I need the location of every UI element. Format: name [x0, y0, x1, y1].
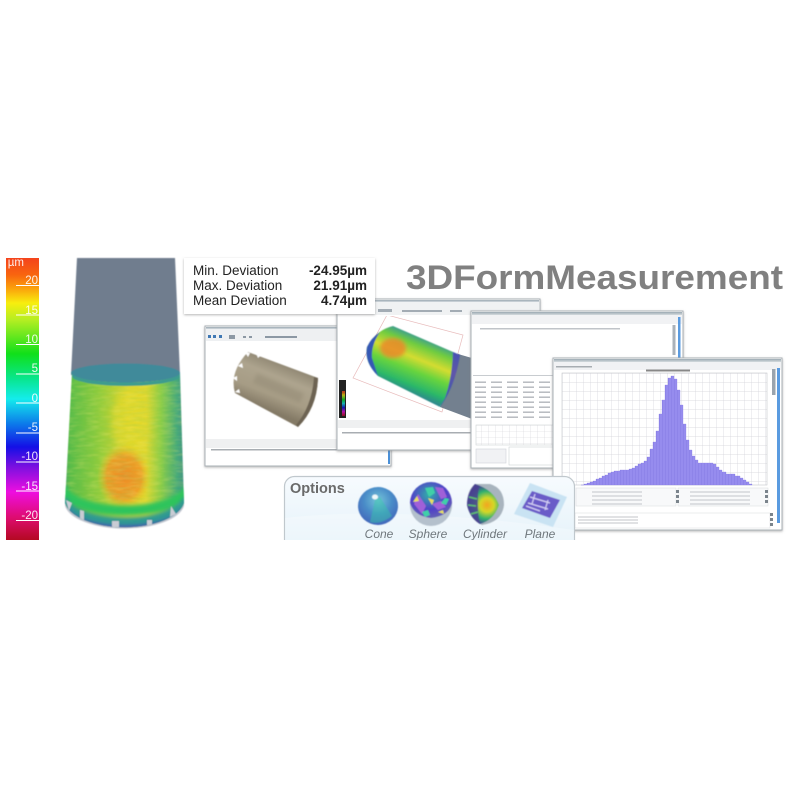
toolbar	[206, 329, 390, 341]
upper table header	[480, 328, 620, 330]
rotated colour cylinder	[353, 315, 472, 419]
tab strip	[554, 362, 781, 370]
scale labels: -15	[21, 481, 38, 493]
stat: maximum deviation: 21.91µm	[313, 278, 367, 293]
stat: maximum deviation: Max. Deviation	[193, 278, 282, 293]
stat: maximum deviation	[193, 278, 367, 293]
bounding box	[353, 315, 463, 412]
window: results table	[471, 311, 683, 468]
options heading: Options	[290, 481, 345, 497]
lower table	[474, 380, 553, 420]
colour scale legend	[6, 257, 39, 540]
title bar	[472, 312, 682, 315]
small line chart panel	[476, 425, 553, 445]
window: colour map view	[337, 299, 540, 450]
icon: sphere	[410, 482, 452, 526]
title bar	[554, 359, 781, 362]
option labels	[365, 529, 555, 540]
input fields	[476, 449, 506, 463]
grid	[562, 373, 767, 485]
cylinder body	[366, 326, 460, 407]
scale labels: -10	[21, 451, 38, 463]
stat: minimum deviation: -24.95µm	[309, 263, 367, 278]
title bar	[338, 300, 539, 302]
scale labels: 20	[25, 275, 38, 287]
lower blue band	[70, 508, 180, 528]
lower teal band	[62, 498, 188, 523]
cone body heat map	[64, 374, 185, 528]
stat: mean deviation: 4.74µm	[321, 293, 367, 308]
options panel	[284, 476, 576, 540]
option labels: Plane	[525, 527, 556, 541]
bottom edge	[65, 503, 184, 529]
chart heading	[646, 370, 690, 372]
scrollbar	[678, 317, 680, 361]
grey shaft	[440, 354, 472, 419]
lower green band	[62, 486, 188, 510]
window: histogram	[553, 358, 782, 530]
toolbar	[338, 302, 539, 315]
log box	[575, 513, 773, 528]
window: raw scan	[205, 326, 391, 466]
histogram bars	[581, 376, 752, 485]
icon: plane	[514, 483, 567, 527]
stat: mean deviation	[193, 293, 367, 308]
title bar	[206, 327, 390, 329]
bottom notches	[66, 500, 176, 531]
bottom data strip	[206, 439, 390, 448]
bottom data strip	[338, 420, 471, 428]
scale labels: 15	[25, 305, 38, 317]
scale labels	[8, 257, 38, 522]
option labels: Sphere	[409, 527, 448, 541]
3D cylinder deviation map	[60, 258, 190, 535]
toolbar buttons	[208, 335, 222, 338]
grey shaft	[71, 258, 180, 375]
icon: cylinder section	[467, 484, 504, 525]
scale labels: -5	[28, 422, 38, 434]
side tool buttons	[772, 369, 776, 395]
scale labels: 5	[32, 363, 38, 375]
mini colour scale	[339, 380, 346, 418]
icon: cone	[358, 487, 398, 525]
toolbar icons	[378, 309, 462, 312]
side tool buttons	[672, 325, 676, 355]
statistics tables	[576, 488, 768, 506]
scale tick marks	[16, 286, 39, 520]
stat: mean deviation: Mean Deviation	[193, 293, 287, 308]
scale labels: -20	[21, 510, 38, 522]
notes box	[509, 447, 553, 465]
scale labels: µm	[8, 257, 24, 269]
panel light swoosh	[285, 514, 574, 540]
cylinder rim interior	[71, 364, 180, 382]
tab strip	[472, 315, 682, 324]
scale labels: 0	[32, 393, 38, 405]
histogram chart	[562, 373, 767, 485]
scrollbar	[777, 368, 780, 523]
stat: minimum deviation	[193, 263, 367, 278]
brown scanned cylinder	[233, 352, 318, 427]
title: 3DFormMeasurement	[406, 259, 783, 297]
scale labels: 10	[25, 334, 38, 346]
stat: minimum deviation: Min. Deviation	[193, 263, 279, 278]
option labels: Cylinder	[463, 527, 508, 541]
deviation stats box	[184, 258, 375, 314]
option labels: Cone	[365, 527, 394, 541]
